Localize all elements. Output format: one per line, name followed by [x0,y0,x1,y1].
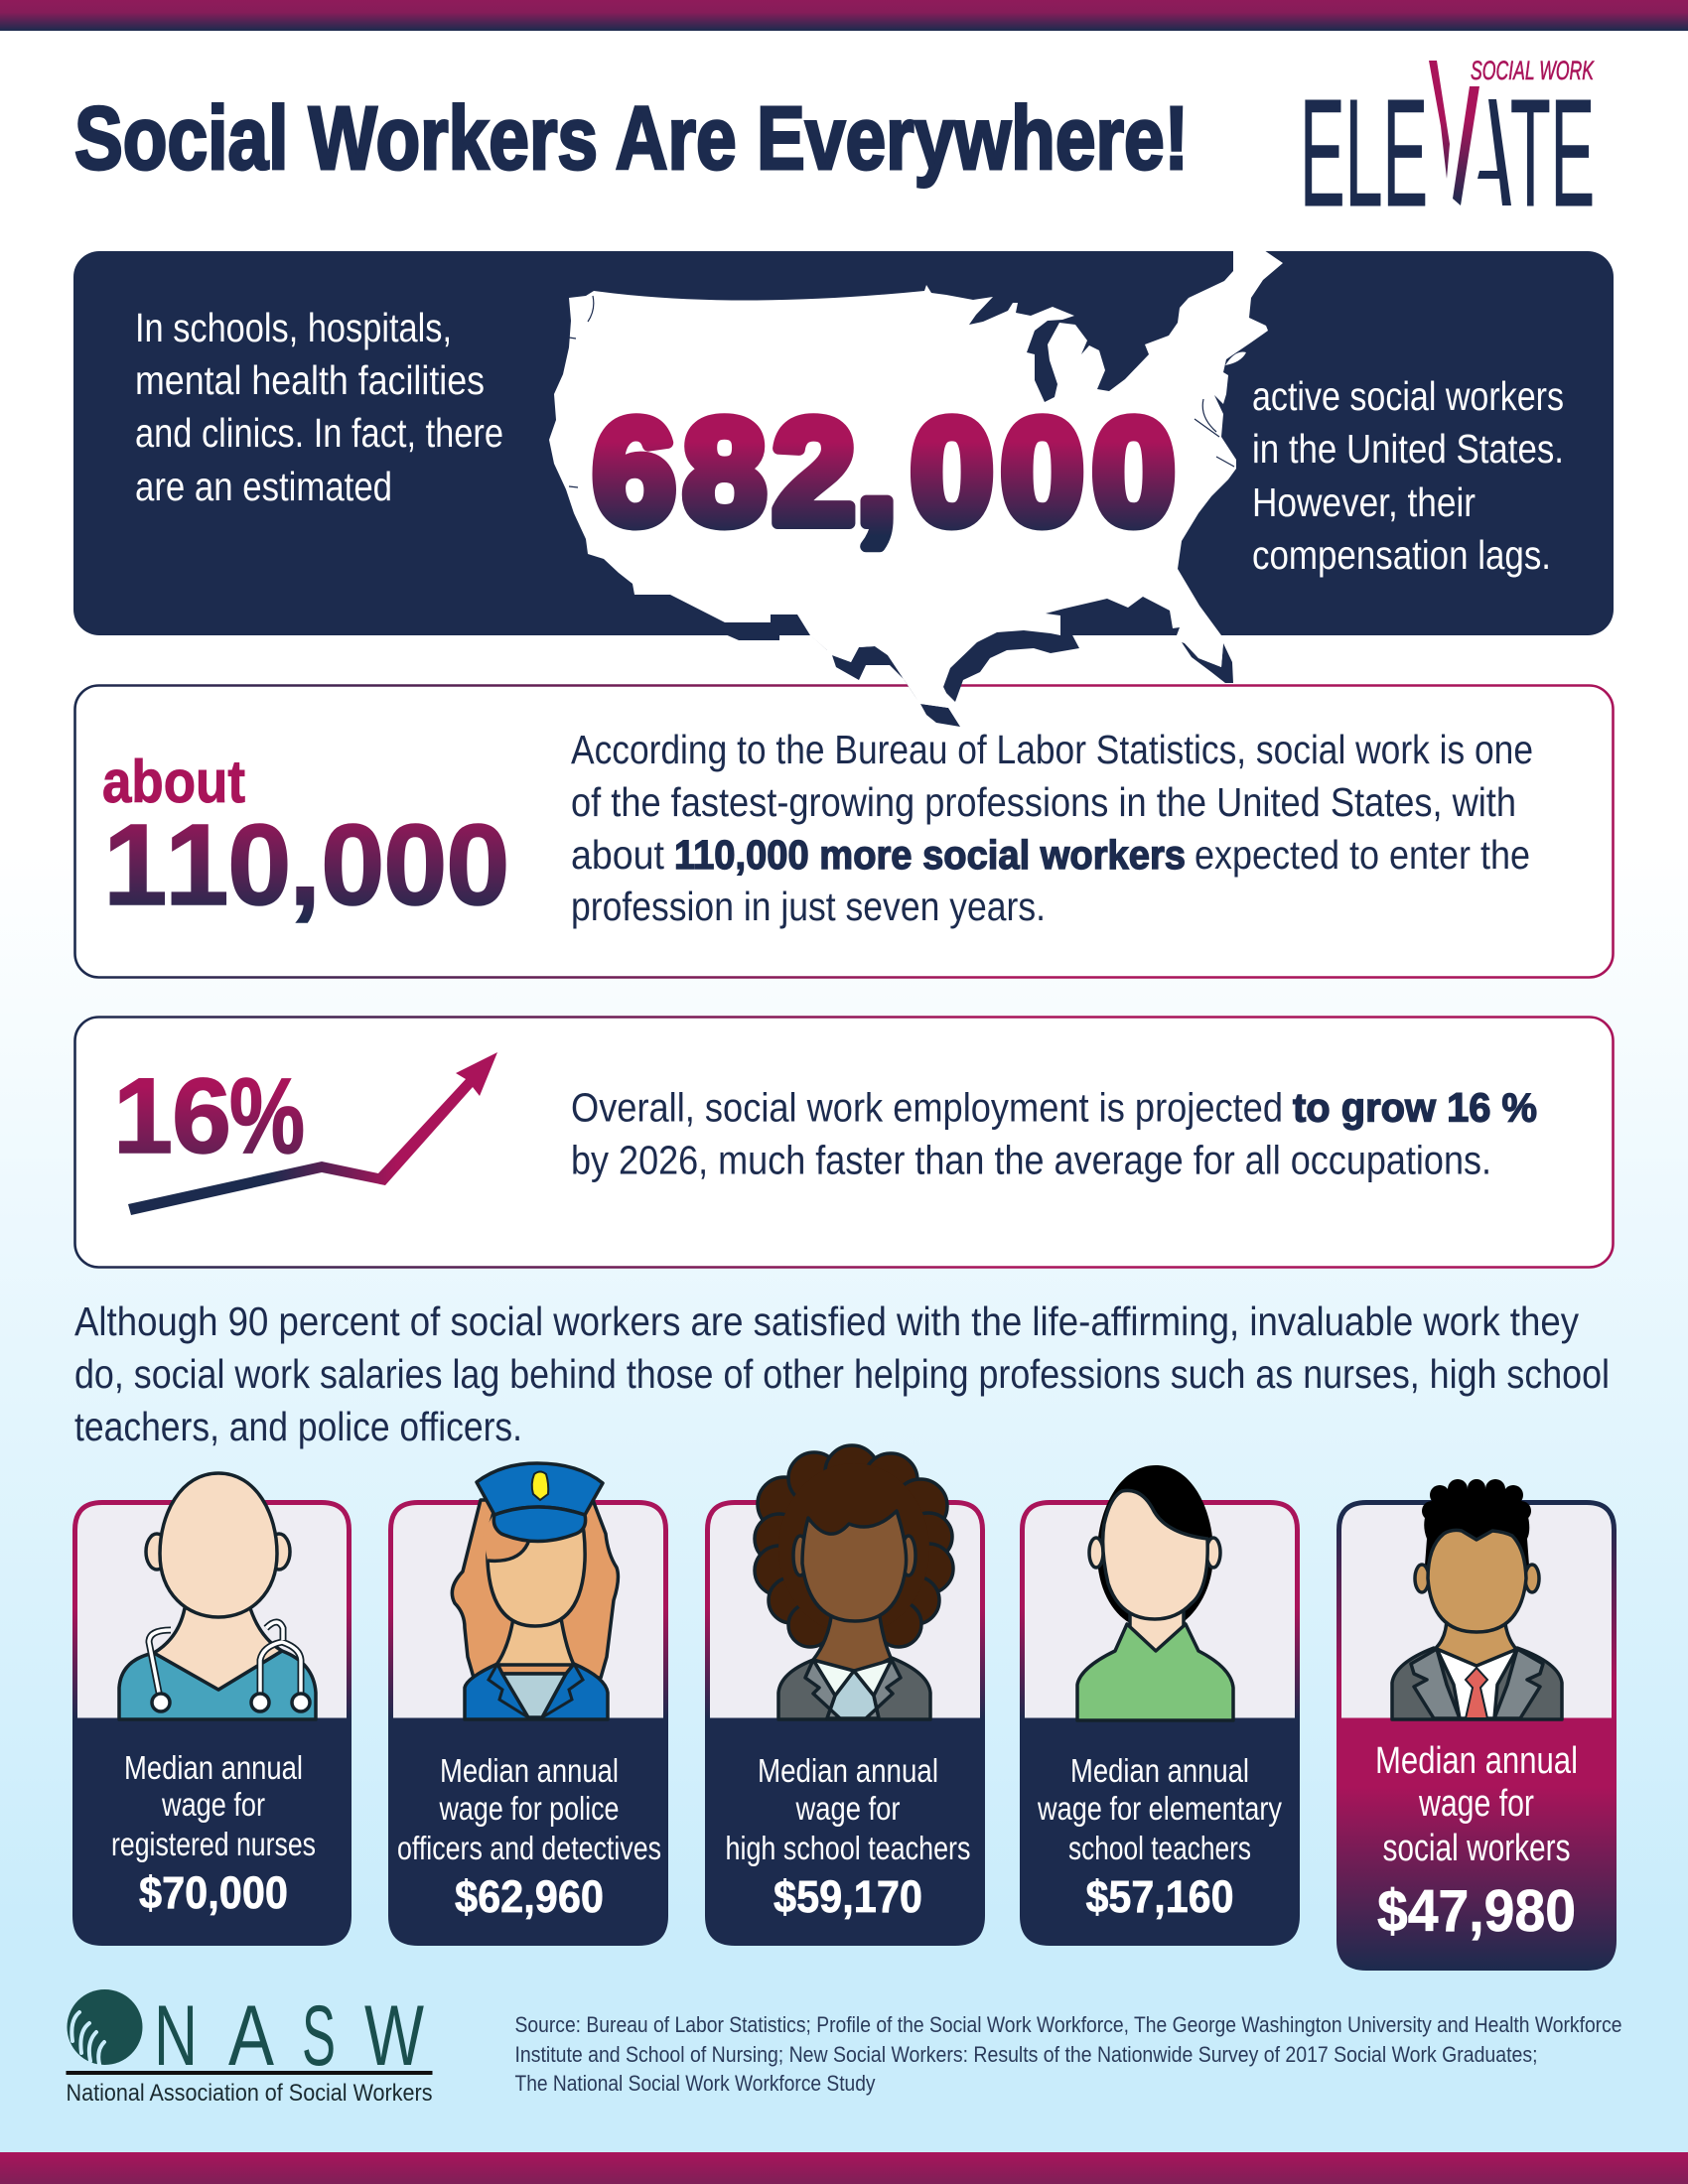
text: intro left of map: and clinics. In fact, there [135,410,503,456]
wage label: wage for [161,1786,265,1823]
map: navy water below the panel [723,625,1233,727]
panel: about 110,000 [75,685,1613,977]
projection paragraph: to grow 16 % [1293,1084,1537,1130]
growth paragraph [571,727,1533,929]
map: coastal inlets [569,296,1234,487]
icon: NASW wave circle [68,1989,143,2068]
logo: Elevate Social Work: SOCIAL WORK [1471,56,1595,85]
logo: NASW: S [302,1988,336,2084]
text: intro left of map: In schools, hospitals, [135,305,452,350]
16% figure: 16 [113,1055,231,1175]
wage label: wage for police [439,1790,620,1827]
card: high school teachers [705,1445,985,1946]
text: intro left of map: mental health facilities [135,357,485,403]
about label: about [102,749,245,815]
growth paragraph: of the fastest-growing professions in the United States, with [571,779,1516,825]
card: registered nurses [72,1473,352,1946]
wage label: social workers [1382,1828,1571,1869]
card: social workers (highlighted) [1336,1479,1617,1971]
wage value: $59,170 [774,1871,922,1922]
wage label: Median annual [758,1752,938,1789]
growth paragraph: According to the Bureau of Labor Statistics, social work is one [571,727,1533,772]
wage label: Median annual [1375,1740,1578,1782]
wage label: officers and detectives [397,1830,661,1866]
headline figure: 682,000: 682,000 [593,388,1175,555]
text: intro left of map [135,305,503,509]
wage label [1375,1740,1578,1869]
text: right of map: in the United States. [1252,426,1564,472]
wage label [1037,1752,1282,1866]
wage label: wage for [1418,1783,1534,1825]
wage value: $62,960 [455,1871,604,1922]
16% figure [113,1055,305,1175]
text: right of map: However, their [1252,479,1476,525]
top bar [0,0,1688,31]
growth paragraph: about [571,832,665,878]
growth paragraph: profession in just seven years. [571,884,1046,929]
arrow: growth line [128,1052,497,1215]
logo: NASW: N [154,1988,198,2084]
text: sources [514,2012,1622,2096]
wage value: $70,000 [139,1867,288,1918]
wage label: school teachers [1068,1830,1251,1866]
text: right of map: active social workers [1252,373,1564,419]
wage value: $47,980 [1377,1878,1576,1944]
wage label: high school teachers [725,1830,971,1866]
wage label: registered nurses [111,1826,316,1862]
logo: NASW: National Association of Social Workers [66,2080,433,2107]
bottom bar [0,2152,1688,2184]
map: Long Island [1225,352,1246,365]
text: satisfaction paragraph [74,1298,1610,1449]
card: police officers and detectives [388,1463,668,1946]
logo: NASW: A [228,1988,275,2084]
wage label: Median annual [440,1752,619,1789]
text: right of map [1252,373,1564,578]
wage label: wage for [795,1790,901,1827]
wage label: Median annual [124,1749,303,1786]
logo: Elevate Social Work: ELE [1300,68,1428,238]
wage label [397,1752,661,1866]
wage label [725,1752,971,1866]
wage value: $57,160 [1086,1871,1233,1922]
card: elementary school teachers [1020,1465,1300,1946]
projection paragraph: by 2026, much faster than the average for all occupations. [571,1138,1491,1183]
figure: social worker [1392,1479,1562,1719]
panel: 682,000 active social workers [73,251,1614,635]
panel: 16% growth [75,1017,1613,1267]
text: sources: Institute and School of Nursing; New Social Workers: Results of the Nationwide Survey of 2017 Social Work Graduates; [514,2042,1537,2067]
map: United States silhouette [549,250,1283,708]
wage label [111,1749,316,1862]
growth paragraph: 110,000 more social workers [674,832,1186,878]
text: intro left of map: are an estimated [135,464,392,509]
logo: NASW [66,1988,433,2107]
title: Social Workers Are Everywhere! [74,89,1189,189]
text: satisfaction paragraph: teachers, and police officers. [74,1404,522,1449]
text: right of map: compensation lags. [1252,532,1551,578]
text: sources: The National Social Work Workforce Study [514,2071,876,2096]
growth paragraph: expected to enter the [1195,832,1530,878]
figure: nurse [119,1473,316,1719]
projection paragraph [571,1084,1537,1183]
110,000 figure: 110,000 [103,800,510,929]
figure: high school teacher [755,1445,953,1719]
projection paragraph: Overall, social work employment is projected [571,1084,1283,1130]
wage label: wage for elementary [1037,1790,1282,1827]
logo: NASW: W [364,1988,424,2084]
wage label: Median annual [1070,1752,1249,1789]
figure: elementary teacher [1077,1465,1233,1720]
figure: police officer [452,1463,618,1719]
16% figure: % [229,1055,305,1175]
